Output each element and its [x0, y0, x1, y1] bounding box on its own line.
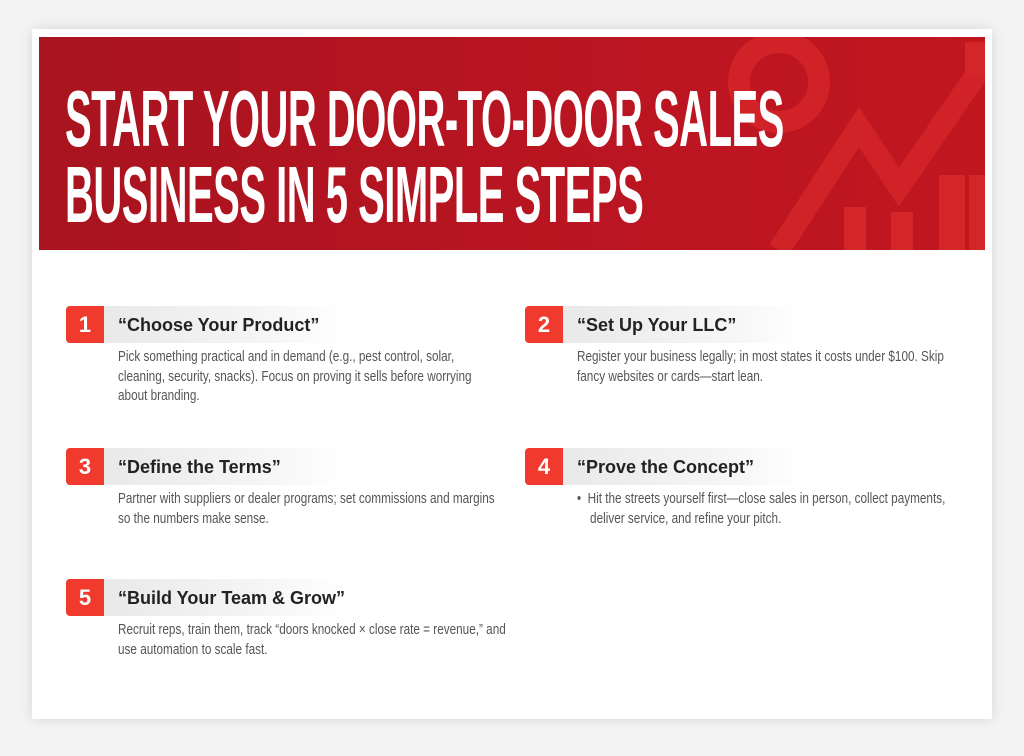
- step 2: [525, 306, 944, 384]
- step 2: 2: [538, 312, 550, 337]
- title: [65, 74, 784, 239]
- title: START YOUR DOOR-TO-DOOR SALES: [65, 74, 784, 163]
- step 3: 3: [79, 454, 91, 479]
- step 2: fancy websites or cards—start lean.: [577, 368, 763, 384]
- step 1: 1: [79, 312, 91, 337]
- step 4: • Hit the streets yourself first—close sales in person, collect payments,: [577, 491, 945, 507]
- step 1: Pick something practical and in demand (e.g., pest control, solar,: [118, 349, 454, 365]
- icon: background chart: [728, 37, 985, 250]
- step 4: 4: [538, 454, 550, 479]
- step 2: Register your business legally; in most states it costs under $100. Skip: [577, 349, 944, 365]
- step 4: deliver service, and refine your pitch.: [590, 510, 781, 526]
- header banner: [39, 37, 985, 250]
- step 1: “Choose Your Product”: [118, 315, 319, 335]
- step 3: “Define the Terms”: [118, 457, 281, 477]
- step 1: cleaning, security, snacks). Focus on proving it sells before worrying: [118, 368, 472, 384]
- step 1: about branding.: [118, 388, 200, 404]
- step 3: Partner with suppliers or dealer programs; set commissions and margins: [118, 491, 495, 507]
- step 3: [66, 448, 495, 526]
- title: BUSINESS IN 5 SIMPLE STEPS: [65, 150, 643, 239]
- step 5: “Build Your Team & Grow”: [118, 588, 345, 608]
- step 3: so the numbers make sense.: [118, 510, 269, 526]
- step 5: Recruit reps, train them, track “doors knocked × close rate = revenue,” and: [118, 622, 506, 638]
- step 5: [66, 579, 506, 658]
- step 4: [525, 448, 945, 526]
- step 5: 5: [79, 585, 91, 610]
- step 4: “Prove the Concept”: [577, 457, 754, 477]
- step 1: [66, 306, 472, 404]
- step 2: “Set Up Your LLC”: [577, 315, 736, 335]
- step 5: use automation to scale fast.: [118, 642, 268, 658]
